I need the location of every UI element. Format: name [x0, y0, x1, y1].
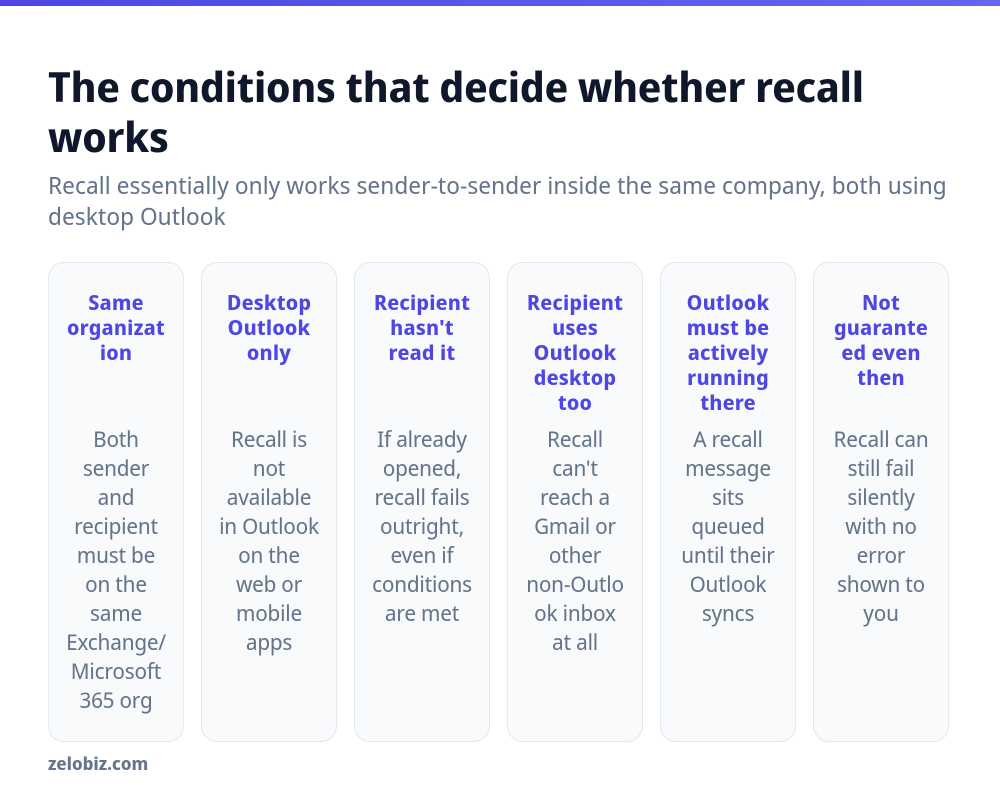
text: recipient uses outlook desktop too: ok inbox	[534, 598, 616, 628]
heading: not guaranteed even then	[834, 289, 928, 392]
heading: recipient hasn't read it: hasn't	[390, 314, 454, 342]
text: recipient hasn't read it: If already	[377, 424, 467, 454]
heading: recipient hasn't read it: read it	[389, 339, 455, 367]
heading: desktop outlook only: Outlook	[228, 314, 310, 342]
text: not guaranteed even then: silently	[847, 482, 915, 512]
text: same organization: must be	[77, 540, 155, 570]
heading: same organization: Same	[88, 289, 144, 317]
text: desktop outlook only: web or	[236, 569, 302, 599]
heading: not guaranteed even then: Not	[862, 289, 900, 317]
panel: outlook must be actively running	[660, 262, 796, 742]
text: same organization: and	[98, 482, 134, 512]
heading: recipient hasn't read it: Recipient	[374, 289, 470, 317]
text: not guaranteed even then: shown to	[837, 569, 925, 599]
heading: outlook must be actively running	[687, 289, 769, 417]
text: same organization: recipient	[74, 511, 158, 541]
title	[48, 59, 864, 165]
text: recipient hasn't read it: recall fails	[375, 482, 469, 512]
text: desktop outlook only	[219, 424, 319, 657]
text: desktop outlook only: Recall is	[231, 424, 307, 454]
heading: same organization: ion	[100, 339, 132, 367]
heading: desktop outlook only	[227, 289, 311, 367]
text: recipient uses outlook desktop too: reach a	[540, 482, 610, 512]
text: outlook must be actively running: queued	[691, 511, 765, 541]
text: desktop outlook only: on the	[238, 540, 300, 570]
panel: recipient uses outlook desktop too	[507, 262, 643, 742]
heading: not guaranteed even then: guarante	[834, 314, 928, 342]
text: recipient uses outlook desktop too: Recall	[547, 424, 603, 454]
subtitle	[48, 169, 947, 233]
heading: outlook must be actively running: Outlook	[687, 289, 769, 317]
text: outlook must be actively running: Outlook	[690, 569, 766, 599]
text: recipient hasn't read it	[372, 424, 472, 628]
text: recipient hasn't read it: are met	[385, 598, 459, 628]
text: recipient hasn't read it: even if	[390, 540, 454, 570]
text: same organization: Exchange/	[66, 627, 166, 657]
heading: recipient uses outlook desktop too	[527, 289, 623, 417]
heading: not guaranteed even then: then	[857, 364, 905, 392]
heading: same organization: organizat	[67, 314, 165, 342]
text: outlook must be actively running: until their	[681, 540, 775, 570]
heading: not guaranteed even then: ed even	[841, 339, 921, 367]
heading: recipient uses outlook desktop too: desktop	[534, 364, 616, 392]
heading: same organization	[67, 289, 165, 367]
panel: not guaranteed even then	[813, 262, 949, 742]
text: desktop outlook only: in Outlook	[219, 511, 319, 541]
footer source: zelobiz.com	[48, 752, 148, 776]
text: recipient hasn't read it: opened,	[383, 453, 461, 483]
text: recipient uses outlook desktop too: Gmail or	[534, 511, 616, 541]
text: not guaranteed even then: with no	[845, 511, 917, 541]
heading: desktop outlook only: only	[247, 339, 291, 367]
text: outlook must be actively running: sits	[712, 482, 744, 512]
text: recipient uses outlook desktop too	[526, 424, 624, 657]
text: same organization	[66, 424, 166, 715]
heading: recipient hasn't read it	[374, 289, 470, 367]
panel: recipient hasn't read it	[354, 262, 490, 742]
text: recipient uses outlook desktop too: can't	[552, 453, 598, 483]
title: The conditions that decide whether recall	[48, 59, 864, 115]
text: not guaranteed even then: you	[863, 598, 899, 628]
text: not guaranteed even then	[834, 424, 928, 628]
heading: outlook must be actively running: must be	[687, 314, 769, 342]
title: works	[48, 109, 169, 165]
text: desktop outlook only: available	[227, 482, 311, 512]
text: same organization: same	[90, 598, 142, 628]
heading: recipient uses outlook desktop too: uses	[552, 314, 598, 342]
heading: recipient uses outlook desktop too: Recipient	[527, 289, 623, 317]
text: same organization: sender	[83, 453, 149, 483]
heading: recipient uses outlook desktop too: Outlook	[534, 339, 616, 367]
text: desktop outlook only: not	[253, 453, 285, 483]
text: recipient uses outlook desktop too: non-Outlo	[526, 569, 624, 599]
subtitle: Recall essentially only works sender-to-sender inside the same company, both using	[48, 169, 947, 202]
panel: desktop outlook only	[201, 262, 337, 742]
text: same organization: on the	[85, 569, 147, 599]
text: outlook must be actively running	[681, 424, 775, 628]
top accent bar	[0, 0, 1000, 6]
text: outlook must be actively running: message	[685, 453, 771, 483]
heading: desktop outlook only: Desktop	[227, 289, 311, 317]
panel: same organization	[48, 262, 184, 742]
heading: outlook must be actively running: actively	[688, 339, 768, 367]
heading: outlook must be actively running: running	[687, 364, 769, 392]
text: desktop outlook only: apps	[246, 627, 292, 657]
text: outlook must be actively running: A recall	[693, 424, 763, 454]
text: not guaranteed even then: error	[857, 540, 905, 570]
text: not guaranteed even then: still fail	[848, 453, 914, 483]
text: recipient uses outlook desktop too: other	[549, 540, 601, 570]
subtitle: desktop Outlook	[48, 200, 226, 233]
text: recipient hasn't read it: conditions	[372, 569, 472, 599]
text: same organization: Both	[93, 424, 139, 454]
text: same organization: Microsoft	[71, 656, 161, 686]
text: same organization: 365 org	[79, 685, 153, 715]
text: not guaranteed even then: Recall can	[834, 424, 928, 454]
text: recipient hasn't read it: outright,	[380, 511, 464, 541]
text: recipient uses outlook desktop too: at all	[552, 627, 598, 657]
text: outlook must be actively running: syncs	[702, 598, 754, 628]
heading: outlook must be actively running: there	[700, 389, 756, 417]
text: desktop outlook only: mobile	[236, 598, 302, 628]
heading: recipient uses outlook desktop too: too	[558, 389, 592, 417]
